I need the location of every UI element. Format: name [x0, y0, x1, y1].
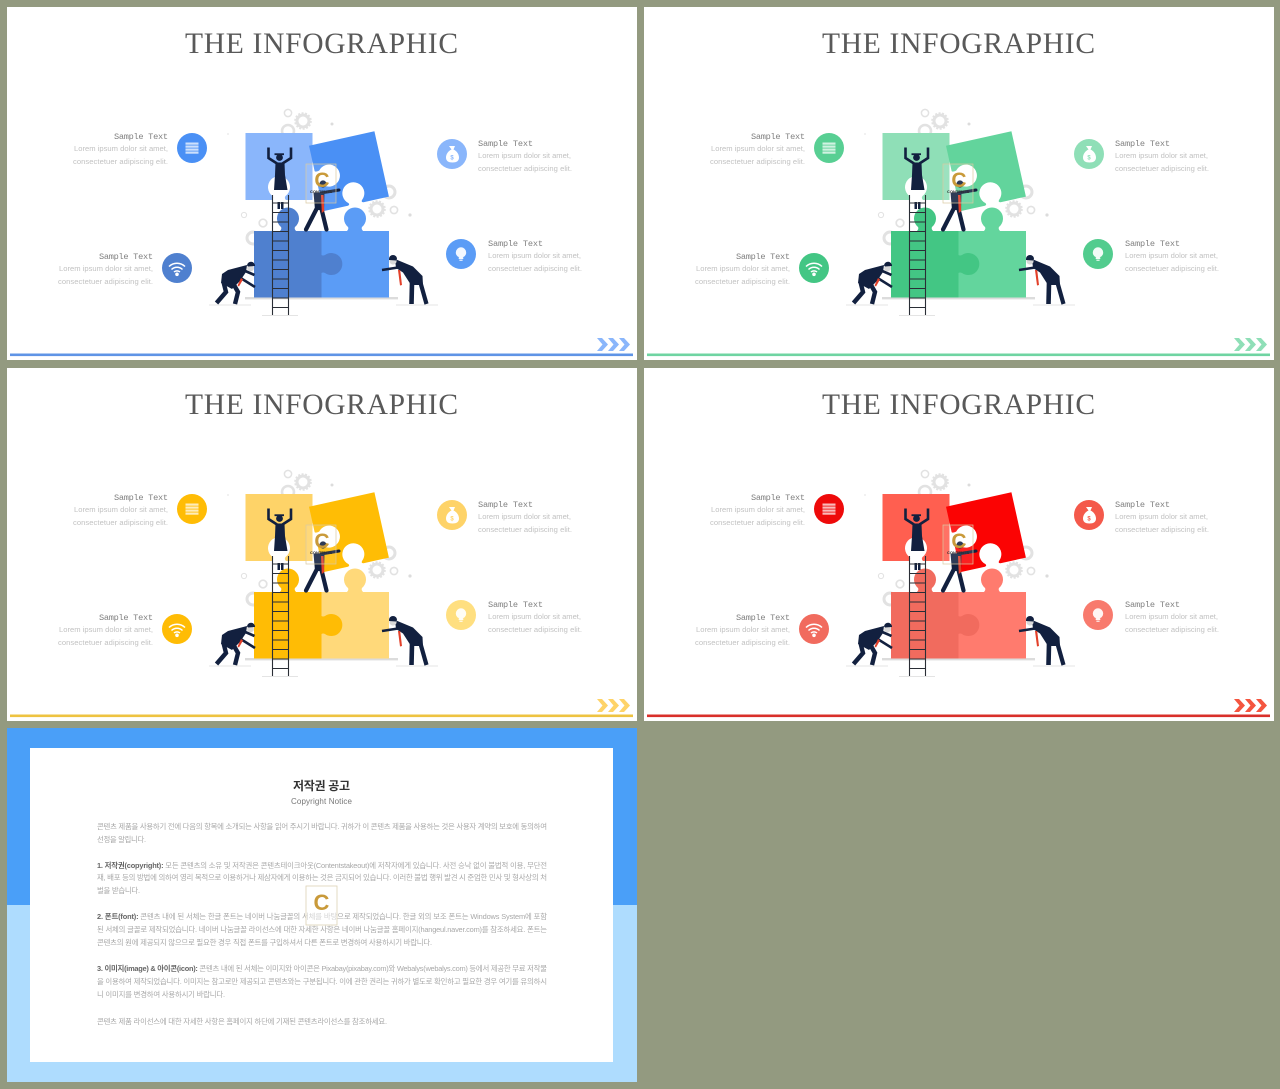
- title: THE INFOGRAPHIC: [185, 28, 458, 60]
- watermark: C: [314, 890, 330, 915]
- callout: top left: consectetuer adipiscing elit.: [710, 518, 805, 527]
- footer line and chevrons: [647, 338, 1270, 356]
- text block: image and icon: 3. 이미지(image) & 아이콘(icon): 콘텐츠 내에 된 서체는 이미지와 아이콘은 Pixabay(pixabay.com)와 Webalys(webalys.com) 등에서 제공한 무료 저작물: [97, 964, 547, 973]
- callout: top right: Lorem ipsum dolor sit amet,: [1115, 512, 1208, 521]
- callout: top right: $: [450, 156, 454, 162]
- watermark: C: [314, 169, 330, 192]
- footer line and chevrons: [10, 699, 633, 717]
- callout: bottom left: Lorem ipsum dolor sit amet,: [696, 264, 790, 273]
- text block: copyright: 1. 저작권(copyright): 모든 콘텐츠의 소유 및 저작권은 콘텐츠테이크아웃(Contentstakeout)에 저작자에게 있습니다. 사전 승낙 없이 불법적 이용, 무단전: [97, 861, 547, 870]
- callout: top left: [73, 132, 207, 166]
- callout: bottom right: consectetuer adipiscing elit.: [488, 264, 582, 273]
- callout: top right: consectetuer adipiscing elit.: [1115, 525, 1209, 534]
- callout: bottom left: [695, 252, 829, 286]
- illustration: puzzle team: [209, 109, 438, 316]
- illustration: puzzle team: [846, 109, 1075, 316]
- illustration: puzzle team: [846, 470, 1075, 677]
- callout: top right: $: [1087, 516, 1091, 522]
- callout: top left: consectetuer adipiscing elit.: [73, 518, 168, 527]
- callout: top right: Sample Text: [1115, 139, 1170, 149]
- callout: bottom left: Sample Text: [736, 613, 790, 623]
- text block: intro: 콘텐츠 제품을 사용하기 전에 다음의 항목에 소개되는 사항을 읽어 주시기 바랍니다. 귀하가 이 콘텐츠 제품을 사용하는 것은 사용자 계약의 보호에 동의하여: [97, 822, 547, 831]
- callout: bottom right: [446, 239, 582, 273]
- panel: green slide: [644, 7, 1274, 360]
- callout: top left: consectetuer adipiscing elit.: [73, 157, 168, 166]
- callout: bottom right: Sample Text: [1125, 600, 1180, 610]
- text block: copyright: 재, 배포 등의 방법에 의하여 영리 목적으로 이용하거나 제삼자에게 이용하는 것은 금지되어 있습니다. 이러한 불법 행위 발견 시 준엄한 민사 및 형사상의 처: [97, 873, 547, 882]
- callout: bottom left: consectetuer adipiscing elit.: [58, 277, 153, 286]
- watermark: CONTENTS: [310, 189, 332, 194]
- callout: top left: Lorem ipsum dolor sit amet,: [711, 505, 805, 514]
- footer line and chevrons: [647, 699, 1270, 717]
- watermark: [306, 525, 336, 564]
- watermark: CONTENTS: [310, 550, 332, 555]
- callout: bottom left: Lorem ipsum dolor sit amet,: [59, 625, 153, 634]
- callout: top left: consectetuer adipiscing elit.: [710, 157, 805, 166]
- callout: top left: Lorem ipsum dolor sit amet,: [74, 144, 168, 153]
- watermark: CONTENTS: [947, 550, 969, 555]
- callout: bottom right: Sample Text: [1125, 239, 1180, 249]
- watermark: C: [951, 169, 967, 192]
- callout: top right: [1074, 139, 1209, 173]
- heading: copyright notice: [291, 778, 353, 806]
- text block: copyright: 벌을 받습니다.: [97, 886, 140, 895]
- callout: top right: [437, 500, 572, 534]
- text block: font: 콘텐츠의 원에 제공되지 않으므로 필요한 경우 직접 폰트를 구입하셔서 다른 폰트로 변경하여 사용하시기 바랍니다.: [97, 938, 432, 947]
- callout: bottom right: [1083, 239, 1219, 273]
- callout: bottom left: Sample Text: [99, 613, 153, 623]
- callout: bottom right: consectetuer adipiscing elit.: [1125, 264, 1219, 273]
- callout: bottom left: [58, 252, 192, 286]
- text block: image and icon: 니 이미지를 변경하여 사용하시기 바랍니다.: [97, 990, 225, 999]
- watermark: CONTENTS: [947, 189, 969, 194]
- illustration: puzzle team: [209, 470, 438, 677]
- text block: copyright: [97, 861, 547, 895]
- callout: bottom right: Lorem ipsum dolor sit amet,: [488, 251, 581, 260]
- callout: bottom left: Lorem ipsum dolor sit amet,: [59, 264, 153, 273]
- callout: top left: [710, 132, 844, 166]
- text block: intro: 선정을 알립니다.: [97, 835, 146, 844]
- callout: top right: Lorem ipsum dolor sit amet,: [1115, 151, 1208, 160]
- panel: yellow slide: [7, 368, 637, 721]
- footer line and chevrons: [10, 338, 633, 356]
- callout: bottom right: Lorem ipsum dolor sit amet,: [488, 612, 581, 621]
- callout: top right: consectetuer adipiscing elit.: [478, 525, 572, 534]
- callout: top left: Lorem ipsum dolor sit amet,: [711, 144, 805, 153]
- callout: bottom left: [58, 613, 192, 647]
- callout: bottom right: consectetuer adipiscing elit.: [488, 625, 582, 634]
- callout: bottom left: consectetuer adipiscing elit.: [695, 277, 790, 286]
- callout: top right: consectetuer adipiscing elit.: [478, 164, 572, 173]
- callout: top left: Sample Text: [114, 493, 168, 503]
- callout: top right: Lorem ipsum dolor sit amet,: [478, 512, 571, 521]
- callout: top left: Sample Text: [114, 132, 168, 142]
- callout: bottom left: consectetuer adipiscing elit.: [695, 638, 790, 647]
- text block: image and icon: [97, 964, 547, 999]
- callout: top left: Sample Text: [751, 493, 805, 503]
- title: THE INFOGRAPHIC: [822, 28, 1095, 60]
- callout: top right: Sample Text: [1115, 500, 1170, 510]
- title: THE INFOGRAPHIC: [185, 389, 458, 421]
- watermark: [306, 164, 336, 203]
- callout: bottom left: Sample Text: [99, 252, 153, 262]
- callout: top left: [73, 493, 207, 527]
- callout: top right: Sample Text: [478, 500, 533, 510]
- callout: bottom right: Sample Text: [488, 600, 543, 610]
- callout: bottom right: Lorem ipsum dolor sit amet,: [1125, 612, 1218, 621]
- callout: top right: $: [450, 516, 454, 522]
- callout: bottom left: Lorem ipsum dolor sit amet,: [696, 625, 790, 634]
- callout: bottom right: Sample Text: [488, 239, 543, 249]
- callout: top right: Sample Text: [478, 139, 533, 149]
- panel: copyright notice: [7, 728, 637, 1082]
- panel: red slide: [644, 368, 1274, 721]
- callout: bottom right: [1083, 600, 1219, 634]
- callout: top right: [437, 139, 572, 173]
- text block: font: 2. 폰트(font): 콘텐츠 내에 된 서체는 한글 폰트는 네이버 나눔글꼴의 서체를 바탕으로 제작되었습니다. 한글 외의 보조 폰트는 Windows System에 포함: [97, 912, 547, 921]
- callout: top left: Sample Text: [751, 132, 805, 142]
- text block: image and icon: 을 이용하여 제작되었습니다. 이미지는 참고로만 제공되고 콘텐츠와는 구분됩니다. 이에 관한 권리는 귀하가 별도로 확인하고 필요한 경우 여기를 유의하시: [97, 977, 547, 986]
- heading: copyright notice: Copyright Notice: [291, 797, 353, 806]
- text block: font: [97, 912, 547, 947]
- callout: bottom left: consectetuer adipiscing elit.: [58, 638, 153, 647]
- callout: top right: Lorem ipsum dolor sit amet,: [478, 151, 571, 160]
- callout: top right: consectetuer adipiscing elit.: [1115, 164, 1209, 173]
- callout: bottom right: consectetuer adipiscing elit.: [1125, 625, 1219, 634]
- watermark: C: [951, 530, 967, 553]
- callout: bottom right: Lorem ipsum dolor sit amet,: [1125, 251, 1218, 260]
- callout: top left: [710, 493, 844, 527]
- watermark: [306, 886, 337, 925]
- watermark: [943, 525, 973, 564]
- watermark: C: [314, 530, 330, 553]
- callout: bottom left: [695, 613, 829, 647]
- callout: top left: Lorem ipsum dolor sit amet,: [74, 505, 168, 514]
- watermark: [943, 164, 973, 203]
- callout: top right: [1074, 500, 1209, 534]
- title: THE INFOGRAPHIC: [822, 389, 1095, 421]
- text block: intro: [97, 822, 547, 844]
- text block: font: 된 서체의 글꼴로 제작되었습니다. 네이버 나눔글꼴 라이선스에 대한 자세한 사항은 네이버 나눔글꼴 홈페이지(hangeul.naver.com)를 참조하세요. 폰트는: [97, 925, 547, 934]
- callout: bottom right: [446, 600, 582, 634]
- callout: bottom left: Sample Text: [736, 252, 790, 262]
- heading: copyright notice: 저작권 공고: [293, 778, 350, 793]
- callout: top right: $: [1087, 156, 1091, 162]
- text block: license note: 콘텐츠 제품 라이선스에 대한 자세한 사항은 홈페이지 하단에 기재된 콘텐츠라이선스를 참조하세요.: [97, 1017, 387, 1026]
- panel: blue slide: [7, 7, 637, 360]
